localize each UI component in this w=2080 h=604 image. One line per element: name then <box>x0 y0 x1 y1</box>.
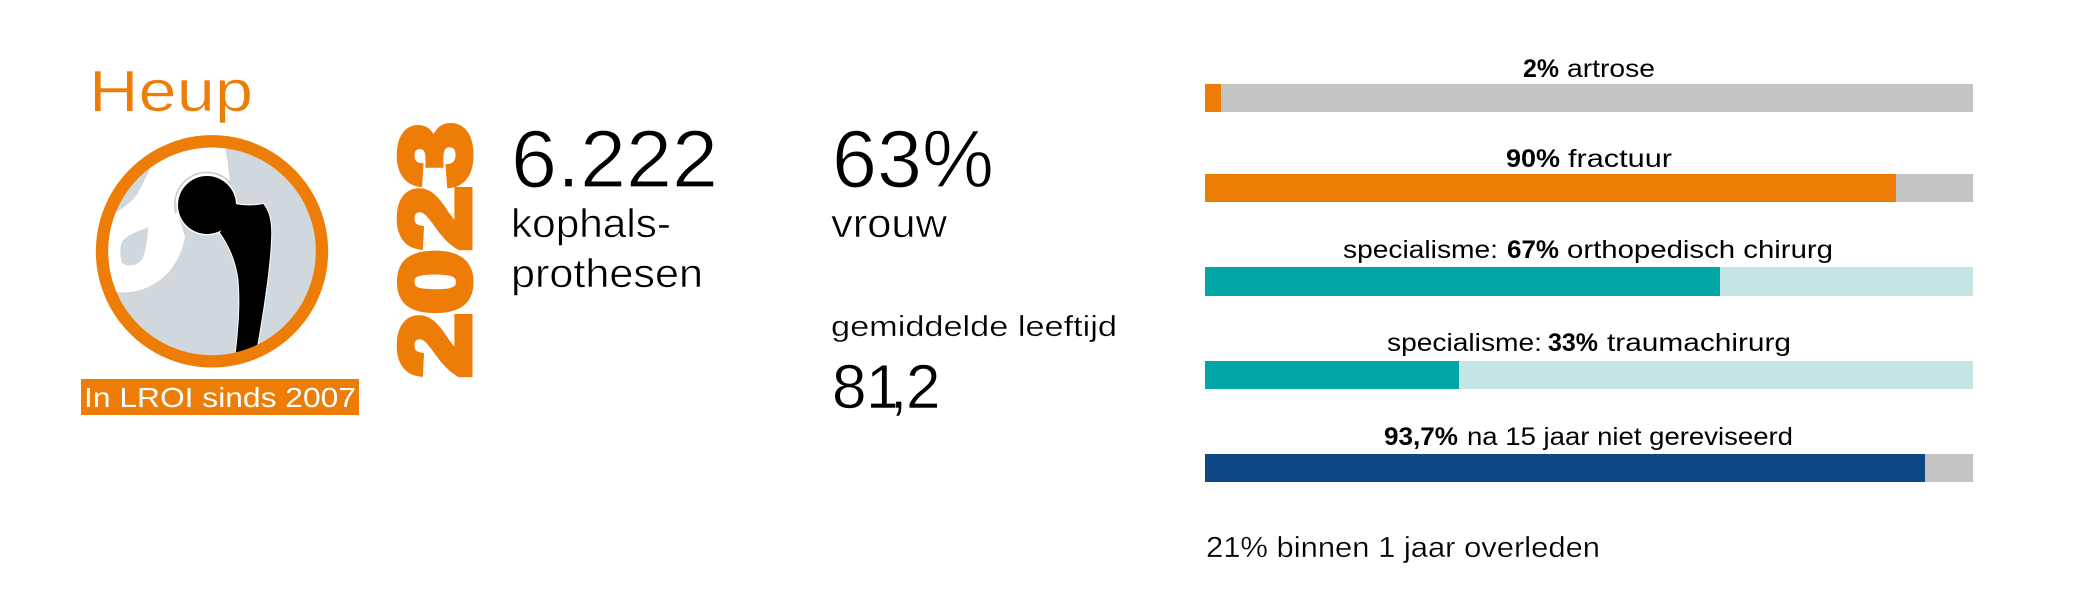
stat: women: vrouw <box>831 202 947 246</box>
stat: mean age <box>831 311 1117 422</box>
icon: hip prosthesis <box>100 141 322 361</box>
stat: women: 63% <box>832 114 994 205</box>
bar: artrose: 2% <box>1523 55 1559 83</box>
bar: traumachirurg: traumachirurg <box>1607 329 1791 357</box>
bar: not revised after 15 years <box>1205 423 1973 482</box>
bar: orthopedisch chirurg <box>1205 236 1973 296</box>
stat: mean age: 81,2 <box>832 353 940 422</box>
bar: orthopedisch chirurg: orthopedisch chirurg <box>1567 236 1833 264</box>
bar: traumachirurg: 33% <box>1548 329 1598 357</box>
stat: number of prostheses <box>511 114 718 296</box>
bar: fractuur: fractuur <box>1568 145 1672 173</box>
bar: not revised after 15 years: 93,7% <box>1384 423 1458 451</box>
bar: fractuur: 90% <box>1506 145 1560 173</box>
bar: artrose <box>1205 55 1973 112</box>
bar: traumachirurg <box>1205 329 1973 389</box>
year: 2023 <box>380 123 490 377</box>
bar: orthopedisch chirurg: specialisme: <box>1343 236 1498 264</box>
stat: mean age: gemiddelde leeftijd <box>831 311 1117 343</box>
stat: women <box>831 114 994 246</box>
stat: number of prostheses: prothesen <box>511 252 703 296</box>
stat: number of prostheses: 6.222 <box>511 114 718 205</box>
stat: number of prostheses: kophals- <box>511 202 671 246</box>
bar: artrose: artrose <box>1567 55 1655 83</box>
title: Heup <box>89 59 253 124</box>
label: in LROI since 2007: In LROI sinds 2007 <box>84 382 356 413</box>
text: mortality: 21% binnen 1 jaar overleden <box>1206 532 1600 564</box>
bar: traumachirurg: specialisme: <box>1387 329 1542 357</box>
bar: fractuur <box>1205 145 1973 202</box>
bar: orthopedisch chirurg: 67% <box>1507 236 1559 264</box>
bar: not revised after 15 years: na 15 jaar niet gereviseerd <box>1467 423 1793 451</box>
